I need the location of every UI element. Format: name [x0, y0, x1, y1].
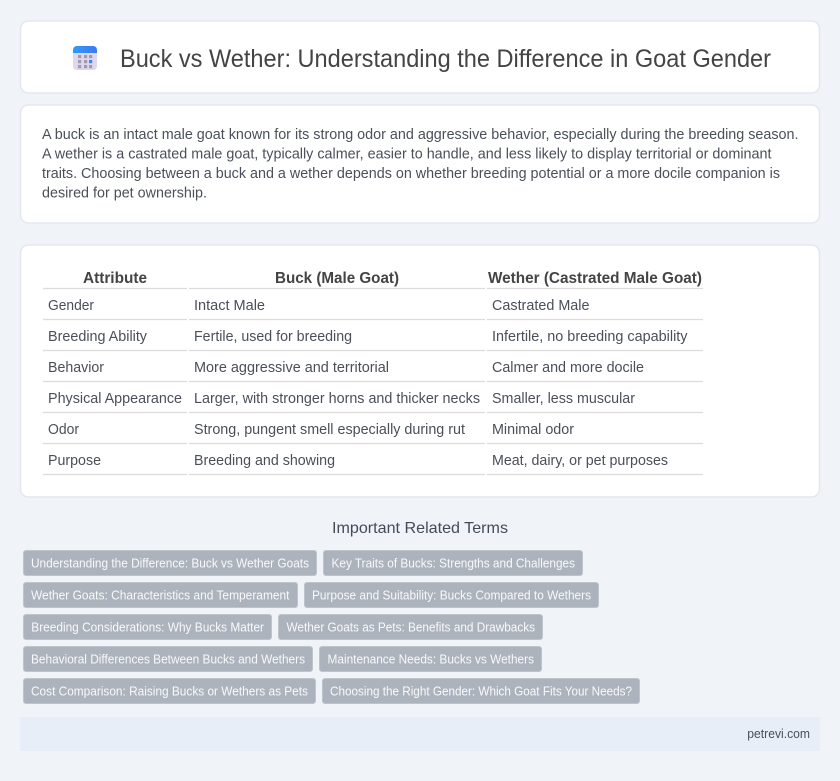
panel: header [20, 21, 820, 93]
table header: Buck (Male Goat) [275, 270, 399, 287]
table row: behavior: Behavior [48, 360, 104, 376]
tag [24, 646, 312, 672]
tag: Behavioral Differences Between Bucks and Wethers [31, 652, 305, 666]
tag: Maintenance Needs: Bucks vs Wethers [328, 652, 534, 666]
table row: gender: Gender [48, 298, 94, 314]
table header [43, 270, 703, 288]
table row: purpose: Meat, dairy, or pet purposes [492, 453, 668, 469]
footer [20, 717, 820, 751]
related term tags [24, 550, 640, 704]
table row: purpose: Breeding and showing [194, 453, 335, 469]
tag: Understanding the Difference: Buck vs Wether Goats [31, 556, 309, 570]
panel: comparison table [20, 245, 820, 497]
tag [304, 582, 598, 608]
text block: intro: A wether is a castrated male goat, typically calmer, easier to handle, and less likely to display territorial or dominant [42, 146, 772, 162]
table row: purpose [43, 453, 703, 474]
tag: Purpose and Suitability: Bucks Compared to Wethers [312, 588, 591, 602]
table row: breeding ability [43, 329, 703, 350]
tag [24, 550, 316, 576]
table row: physical appearance [43, 391, 703, 412]
tag: Key Traits of Bucks: Strengths and Challenges [332, 556, 575, 570]
table row: odor: Odor [48, 422, 79, 438]
table row: odor: Strong, pungent smell especially during rut [194, 422, 465, 438]
table row: physical appearance: Physical Appearance [48, 391, 182, 407]
table row: breeding ability: Infertile, no breeding capability [492, 329, 688, 345]
table row: behavior: Calmer and more docile [492, 360, 644, 376]
tag [278, 614, 542, 640]
table row: gender: Castrated Male [492, 298, 590, 314]
tag: Wether Goats: Characteristics and Temperament [31, 588, 290, 602]
tag [24, 582, 298, 608]
text block: intro [42, 127, 798, 202]
text block: intro: traits. Choosing between a buck and a wether depends on whether breeding potential or a more docile companion is [42, 166, 780, 182]
table row: breeding ability: Fertile, used for breeding [194, 329, 352, 345]
table row: gender [43, 298, 703, 320]
tag [24, 614, 272, 640]
icon: calendar [73, 46, 97, 70]
table row: odor: Minimal odor [492, 422, 574, 438]
title: Buck vs Wether: Understanding the Difference in Goat Gender [120, 45, 771, 73]
tag [322, 678, 640, 704]
footer credit: petrevi.com [747, 727, 810, 741]
text block: intro: desired for pet ownership. [42, 186, 207, 202]
tag [324, 550, 582, 576]
tag: Cost Comparison: Raising Bucks or Wethers as Pets [31, 684, 308, 698]
table row: breeding ability: Breeding Ability [48, 329, 148, 345]
table row: odor [43, 422, 703, 444]
table header: Attribute [83, 270, 147, 287]
tag: Wether Goats as Pets: Benefits and Drawbacks [286, 620, 535, 634]
heading: important related terms: Important Related Terms [332, 520, 508, 537]
table header: Wether (Castrated Male Goat) [488, 270, 702, 287]
table row: physical appearance: Larger, with stronger horns and thicker necks [194, 391, 480, 407]
table row: behavior: More aggressive and territorial [194, 360, 389, 376]
table row: gender: Intact Male [194, 298, 265, 314]
tag: Breeding Considerations: Why Bucks Matter [31, 620, 265, 634]
table row: physical appearance: Smaller, less muscular [492, 391, 635, 407]
table row: behavior [43, 360, 703, 382]
panel: intro paragraph [20, 105, 820, 223]
tag: Choosing the Right Gender: Which Goat Fits Your Needs? [330, 684, 632, 698]
text block: intro: A buck is an intact male goat known for its strong odor and aggressive behavior, especially during the breeding season. [42, 127, 798, 143]
tag [24, 678, 316, 704]
tag [320, 646, 542, 672]
table row: purpose: Purpose [48, 453, 101, 469]
